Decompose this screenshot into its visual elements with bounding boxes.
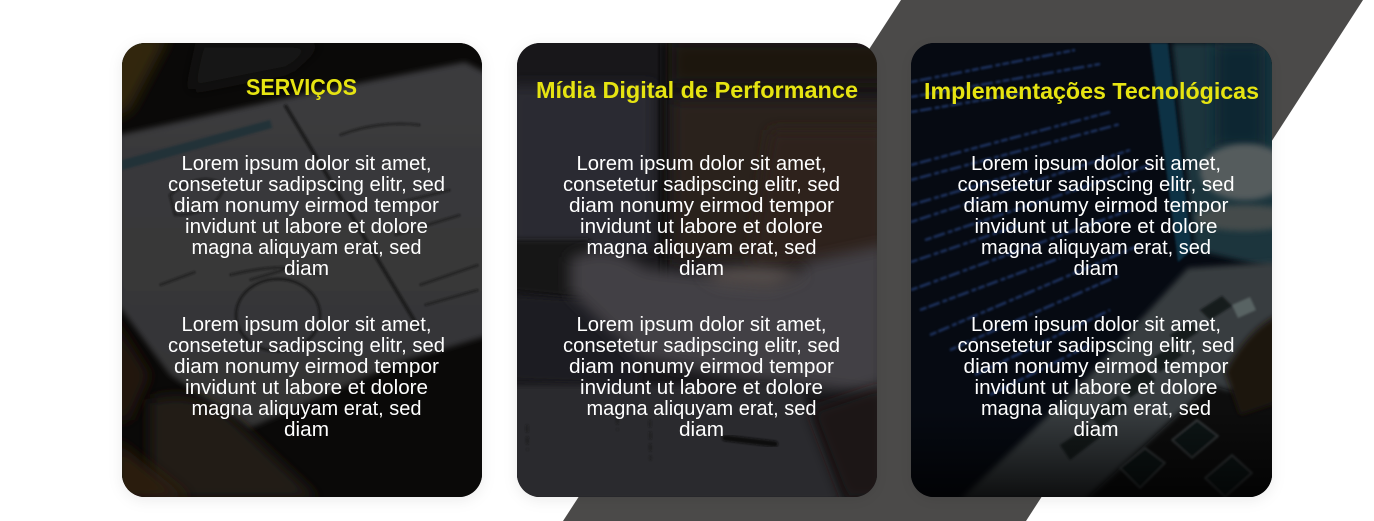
text block: second paragraph: Lorem ipsum dolor sit amet, — [971, 314, 1221, 336]
text block: first paragraph — [563, 153, 840, 280]
text block: second paragraph: magna aliquyam erat, sed — [192, 398, 422, 420]
text block: second paragraph: Lorem ipsum dolor sit amet, — [576, 314, 826, 336]
panel: SERVIÇOS card — [110, 35, 490, 500]
text block: first paragraph — [168, 153, 445, 280]
photo: person working at a computer — [510, 43, 887, 500]
text block: second paragraph — [958, 314, 1234, 441]
text block: first paragraph: diam — [284, 258, 329, 280]
heading: Mídia Digital de Performance: Mídia Digital de Performance — [536, 77, 858, 103]
text block: second paragraph: consetetur sadipscing elitr, sed — [563, 335, 840, 357]
text block: first paragraph: consetetur sadipscing elitr, sed — [958, 174, 1234, 196]
text block: second paragraph: consetetur sadipscing elitr, sed — [958, 335, 1234, 357]
diagonal grey background band — [563, 0, 1363, 521]
text block: first paragraph: diam — [679, 258, 724, 280]
text block: second paragraph — [563, 314, 840, 441]
text block: first paragraph: invidunt ut labore et dolore — [580, 216, 823, 238]
text block: second paragraph: magna aliquyam erat, sed — [981, 398, 1211, 420]
text block: second paragraph: consetetur sadipscing elitr, sed — [168, 335, 445, 357]
text block: second paragraph: Lorem ipsum dolor sit amet, — [182, 314, 432, 336]
text block: second paragraph: diam nonumy eirmod tempor — [174, 356, 439, 378]
text block: second paragraph: diam — [679, 419, 724, 441]
text block: first paragraph — [958, 153, 1234, 280]
text block: first paragraph: magna aliquyam erat, sed — [192, 237, 422, 259]
text block: first paragraph: diam — [1074, 258, 1118, 280]
panel: Mídia Digital de Performance card — [510, 43, 887, 500]
text block: second paragraph: diam nonumy eirmod tempor — [569, 356, 834, 378]
photo: laptop with source code — [911, 43, 1295, 500]
text block: first paragraph: Lorem ipsum dolor sit amet, — [182, 153, 432, 175]
panel: Implementações Tecnológicas card — [911, 43, 1295, 500]
text block: first paragraph: consetetur sadipscing elitr, sed — [563, 174, 840, 196]
text block: first paragraph: magna aliquyam erat, sed — [981, 237, 1211, 259]
text block: second paragraph: diam nonumy eirmod tempor — [964, 356, 1229, 378]
heading: SERVIÇOS: SERVIÇOS — [246, 74, 357, 100]
text block: first paragraph: diam nonumy eirmod tempor — [174, 195, 439, 217]
text block: second paragraph: diam — [284, 419, 329, 441]
photo: notebook with handwritten notes — [110, 35, 490, 500]
text block: second paragraph: magna aliquyam erat, sed — [586, 398, 816, 420]
text block: first paragraph: magna aliquyam erat, sed — [586, 237, 816, 259]
text block: first paragraph: consetetur sadipscing elitr, sed — [168, 174, 445, 196]
text block: first paragraph: Lorem ipsum dolor sit amet, — [576, 153, 826, 175]
text block: first paragraph: diam nonumy eirmod tempor — [569, 195, 834, 217]
text block: second paragraph: invidunt ut labore et dolore — [580, 377, 823, 399]
text block: second paragraph: invidunt ut labore et dolore — [185, 377, 428, 399]
text block: first paragraph: Lorem ipsum dolor sit amet, — [971, 153, 1221, 175]
text block: first paragraph: diam nonumy eirmod tempor — [964, 195, 1229, 217]
text block: second paragraph — [168, 314, 445, 441]
heading: Implementações Tecnológicas: Implementações Tecnológicas — [924, 78, 1259, 104]
text block: second paragraph: diam — [1074, 419, 1118, 441]
text block: first paragraph: invidunt ut labore et dolore — [974, 216, 1218, 238]
text block: second paragraph: invidunt ut labore et dolore — [974, 377, 1218, 399]
text block: first paragraph: invidunt ut labore et dolore — [185, 216, 428, 238]
